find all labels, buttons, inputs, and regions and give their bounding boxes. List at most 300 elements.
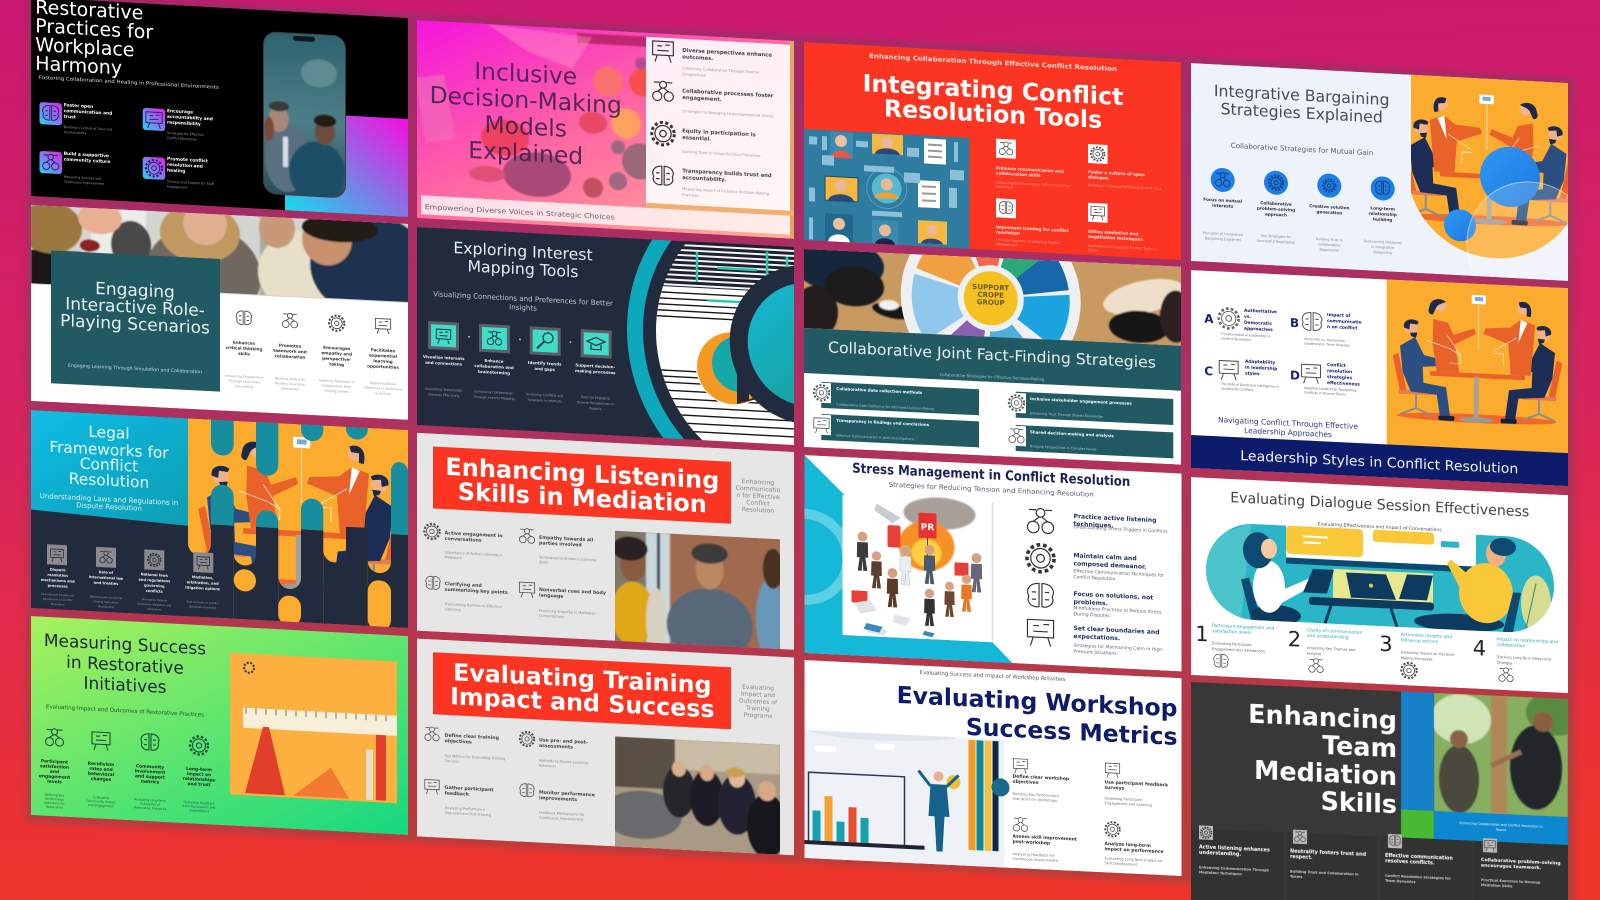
training point 1: objectives [445, 738, 472, 746]
icon: idea gear [1027, 544, 1054, 572]
benefit 2: Realistic Character [275, 381, 306, 387]
slide: Evaluating Workshop Success Metrics [804, 660, 1182, 876]
skill 2: Skills [539, 560, 548, 565]
benefit 4: Exploring Ethical [370, 381, 396, 386]
metric 2: and understanding [1307, 633, 1349, 641]
metric 3: Actionable insights and [1401, 632, 1452, 640]
benefit 4: Facilitates [371, 347, 396, 353]
benefit 3: Fostering Teamwork in [319, 378, 355, 384]
point 4 [682, 168, 772, 197]
metric 4: Tracking Long-Term Behavioral [1496, 655, 1551, 662]
icon: accountability [143, 108, 165, 131]
strategy 1: Focus on mutual [1203, 197, 1243, 204]
benefit 3: Encourages [323, 345, 351, 351]
tip 2: Effective Communication Techniques for [1074, 568, 1164, 579]
tool 3: resolution [996, 229, 1020, 236]
style C [1204, 357, 1279, 393]
subtitle: Strategies for Reducing Tension and Enhancing Resolution [889, 481, 1094, 499]
tip 1: Understanding Stress Triggers in Conflicts [1074, 524, 1168, 535]
metric 4: Skill Development [1104, 861, 1138, 867]
strategy 2: approach [1265, 211, 1287, 218]
slide: Integrating Conflict Resolution Tools [804, 42, 1181, 260]
benefit 3: perspective- [322, 356, 352, 362]
title panel [31, 410, 188, 526]
law 2: Role of [99, 570, 114, 575]
step 4: making processes [575, 368, 616, 375]
item: community: community culture [64, 157, 110, 165]
item: accountability: Strategies for Effective [167, 131, 204, 137]
strategy 4: in Integrative [1371, 245, 1394, 250]
metric 4: Gathering Feedback [183, 800, 215, 806]
slide: Inclusive Decision-Making Models Explained [414, 20, 794, 239]
style C: Adaptability [1245, 359, 1275, 366]
skill 1: Importance of Active Listening in [445, 550, 502, 557]
metric 1: Define clear workshop [1013, 773, 1070, 782]
strategy 3: generation [1316, 209, 1342, 216]
slide: Integrative Bargaining Strategies Explained [1191, 63, 1568, 281]
skill 2: Neutrality fosters trust and [1290, 848, 1367, 858]
item: accountability: responsibility [167, 120, 201, 127]
benefit 2: Interaction [281, 386, 299, 391]
step 4: Projects [589, 406, 602, 411]
metric 3: Making Processes [1401, 656, 1433, 662]
slide: Legal Frameworks for Conflict Resolution [31, 410, 408, 632]
law 1: Dispute [50, 568, 66, 572]
training point 1: Key Metrics for Evaluating Training [445, 754, 505, 761]
slide: Enhancing Team Mediation Skills [1191, 675, 1586, 900]
style B: B [1290, 316, 1299, 330]
title band: Collaborative Strategies for Effective Decision-Making [940, 372, 1045, 382]
title: Measuring Success [44, 631, 206, 659]
training point 3: Gather participant [445, 785, 494, 793]
metric 2: Community Impact [86, 799, 117, 804]
metric 1: Defining Key Performance [1013, 792, 1060, 798]
side subtitle: Outcomes of [739, 697, 778, 706]
metric 1: Restorative [46, 805, 63, 810]
metric 4 [1104, 822, 1164, 868]
title band: Leadership Styles in Conflict Resolution [1240, 448, 1518, 477]
skill 3: Overcoming Barriers to Effective [445, 602, 502, 609]
icon: board [653, 41, 673, 63]
step 3: Analyzing Conflicts and [526, 392, 563, 398]
subtitle: Insights [509, 302, 537, 313]
title: Resolution Tools [884, 94, 1102, 134]
icon: communication [40, 102, 62, 125]
tip 4: Strategies for Maintaining Calm in High- [1074, 643, 1164, 653]
metric 3: 3 [1379, 631, 1393, 656]
law 4: Resolution Processes [189, 604, 217, 610]
skill 1: Active engagement in [445, 530, 503, 539]
law 1 [41, 544, 75, 607]
step 2 [472, 323, 515, 401]
tip 4: expectations. [1074, 633, 1120, 642]
point 1: Perspectives [682, 72, 706, 78]
style A: Democratic [1244, 320, 1273, 327]
strategy 1: Principles of Integrative [1203, 231, 1243, 237]
step 1: Interests Effectively [428, 392, 460, 398]
strategy 4: building [1373, 216, 1392, 222]
tip 1: Practice active listening [1074, 513, 1156, 524]
style B: Autocratic vs. Democratic [1304, 337, 1345, 343]
step 2: Through Interest Mapping [472, 395, 515, 401]
title: Harmony [35, 53, 122, 79]
law 3: conflicts [146, 589, 163, 594]
training point 3 [425, 779, 494, 817]
finding 4 [1007, 425, 1173, 458]
tool 4: Utilize mediation and [1088, 229, 1138, 236]
strategy 4: Long-term [1370, 205, 1396, 212]
title: Workplace [35, 34, 134, 61]
metric 4: and trust [188, 781, 210, 788]
metric 4: from Participants and [182, 804, 216, 810]
training point 3: feedback [445, 790, 470, 798]
title panel: Legal [88, 423, 130, 443]
style B: communicatio [1327, 318, 1362, 326]
subtitle: Leadership Approaches [1244, 426, 1332, 439]
style D: Adaptive Leadership: Navigating [1304, 386, 1356, 392]
strategy 3: Negotiation [1319, 248, 1339, 253]
illustration: meeting in circle [1402, 74, 1595, 313]
slide: Stress Management in Conflict Resolution [762, 453, 1182, 671]
metric 4: Evaluating Long-Term Impact on [1104, 856, 1162, 863]
training point 4: improvements [539, 795, 577, 803]
law 4: Role of Courts in Conflict [187, 600, 219, 605]
benefit 1: Storytelling [235, 384, 253, 389]
slide: Evaluating Dialogue Session Effectiveness [1191, 477, 1568, 693]
skill 3 [426, 576, 508, 614]
metric 2 [1104, 763, 1169, 808]
skill 3: Effective communication [1385, 853, 1453, 862]
tool 1: Enhance communication and [996, 165, 1064, 174]
metric 2: rates and [89, 766, 113, 773]
title: Models [484, 110, 567, 143]
training point 1: Define clear training [445, 733, 499, 741]
skill 1 [424, 523, 503, 562]
title panel: Understanding Laws and Regulations in [40, 492, 178, 507]
tool 2: Foster a culture of open [1088, 169, 1145, 177]
style A: Authoritative [1244, 308, 1277, 315]
style A: Transformational Leadership in [1220, 332, 1270, 338]
title: Team [1322, 730, 1397, 763]
skill 4: language [539, 593, 563, 600]
title panel [51, 251, 220, 392]
abstract chart image [635, 162, 971, 515]
tip 2: composed demeanor. [1074, 560, 1146, 571]
title box [433, 447, 731, 524]
skill 2 [519, 528, 596, 567]
metric 3: Restorative Practices [134, 805, 167, 811]
title box: Evaluating Training [453, 658, 711, 699]
metric 2: Insights [1307, 652, 1321, 656]
metric 1 [1012, 759, 1070, 804]
finding 4: Bridging Perspectives in Complex Issues [1030, 444, 1097, 451]
photo: group discussion [18, 192, 430, 336]
point 1: Enhancing Collaboration Through Diverse [682, 66, 760, 75]
skill 4 [1474, 838, 1568, 900]
tip 3: During Disputes [1074, 611, 1110, 619]
finding 3: Enhancing Trust Through Shared Knowledge [1030, 411, 1103, 419]
benefit 3 [319, 315, 355, 394]
step 4: Support decision- [575, 362, 616, 370]
training point 4: Feedback Mechanisms for [539, 811, 585, 817]
benefit 4: learning [373, 358, 393, 364]
finding 1 [812, 381, 979, 415]
skill 4 [519, 582, 606, 621]
metric 4: relationships [183, 776, 216, 784]
style C: styles [1245, 371, 1260, 377]
training point 2: assessments [539, 743, 573, 751]
point 4: accountability. [682, 175, 726, 183]
benefit 1: Enhances [233, 340, 256, 346]
title: Practices for [35, 15, 153, 44]
style A: approaches [1244, 326, 1273, 333]
tip 4 [1074, 625, 1164, 659]
title: Integrative Bargaining [1214, 81, 1389, 109]
point 4: Measuring Impact of Inclusive Decision-Making [682, 187, 769, 196]
tool 4 [1087, 203, 1156, 256]
training point 3: Improvement Post-Training [445, 811, 491, 817]
metric 1: 1 [1195, 621, 1209, 646]
title panel: Conflict [80, 455, 138, 476]
law 3: Arbitration [147, 607, 162, 612]
step 4: Tools for Engaging [580, 395, 610, 401]
point 2: Strategies for Engaging Underrepresented Voices [682, 109, 773, 118]
style A [1204, 306, 1277, 343]
metric 4 [182, 736, 216, 814]
style B: Leadership in Team Disputes [1304, 341, 1350, 348]
skill 2: Empathy towards all [539, 535, 594, 544]
item: accountability: accountability and [167, 114, 213, 122]
style C: in leadership [1245, 365, 1277, 372]
icon: person [653, 81, 673, 101]
title: Success Metrics [966, 713, 1178, 751]
skill 2: respect. [1290, 854, 1313, 861]
metric 1: Engagement and Satisfaction [1212, 647, 1265, 654]
tip 3: problems. [1074, 599, 1108, 607]
skill 1: Enhancing Communication Through [1199, 865, 1270, 873]
skill 2: Techniques to Enhance Listening [538, 555, 596, 562]
benefit 4 [364, 318, 402, 397]
benefit 2: Building Skills with [275, 376, 305, 382]
skill 3: Clarifying and [445, 581, 482, 589]
style B [1290, 310, 1362, 348]
metric 4: Long-term [186, 766, 212, 773]
side subtitle: n for Effective [736, 492, 780, 501]
law 4: litigation options [185, 586, 220, 591]
title panel: Resolution [69, 470, 149, 492]
metric 3: Continuous Improvement [1013, 857, 1059, 863]
training point 2: Use pre- and post- [539, 737, 588, 746]
item: open communication: Building a Culture of Trust and [64, 125, 112, 132]
metric 3: Outcomes of [140, 802, 161, 807]
illustration: meeting [1387, 279, 1568, 456]
step 2: Enhancing Collaboration [475, 389, 513, 395]
item: open communication [64, 102, 112, 137]
title: Decision-Making [430, 81, 622, 119]
tool 3: Implement training for conflict [996, 224, 1069, 233]
strategy 2: Collaborative [1260, 200, 1292, 207]
tool 2 [1088, 144, 1162, 191]
skill 1: Mediation [445, 555, 462, 560]
title panel: Frameworks for [49, 438, 169, 462]
caption strip [1434, 811, 1568, 845]
slide: Collaborative Joint Fact-Finding Strategies [794, 199, 1192, 465]
metric 4: Changes [1497, 661, 1512, 665]
subtitle: Fostering Collaboration and Healing in Professional Environments [39, 75, 219, 91]
benefit 2 [273, 312, 307, 392]
style A: vs. [1244, 315, 1251, 320]
law 1: Agreements in Conflict [43, 597, 72, 602]
law 1: mechanisms and [41, 578, 75, 584]
icon: brain [1028, 583, 1053, 608]
finding 4: Shared decision-making and analysis [1030, 429, 1114, 438]
metric 2: Clarity of communication [1307, 627, 1362, 636]
side subtitle: Conflict [746, 499, 770, 508]
side subtitle: Evaluating [742, 684, 774, 692]
skill 2: Building Trust and Collaboration in [1290, 869, 1359, 877]
title band: Collaborative Joint Fact-Finding Strategies [828, 338, 1156, 372]
finding 1: Collaborative Data Gathering for Informed Decision-Making [836, 403, 934, 411]
tip 3: Mindfulness Practices to Reduce Stress [1074, 605, 1162, 616]
metric 3: involvement [135, 768, 165, 776]
step 4 [575, 329, 616, 412]
metric 4: collaboration [1497, 642, 1526, 649]
skill 4: Practical Exercises to Develop [1481, 878, 1541, 885]
benefit 1 [225, 310, 264, 390]
benefit 3: Collaborative Role- [322, 384, 352, 389]
tool 1: Resolution [996, 185, 1013, 190]
style C: The Role of Emotional Intelligence in [1220, 382, 1279, 389]
illustration: workshop metrics [804, 730, 1010, 868]
skill 4: Mediation Skills [1481, 883, 1512, 888]
step 2: collaboration and [474, 363, 514, 370]
title box [433, 652, 731, 729]
point 3 [682, 128, 761, 158]
icon: listening [1027, 508, 1054, 534]
training point 4: Continuous Improvement [539, 816, 584, 822]
item: healing: Promote conflict [167, 156, 208, 164]
title: Strategies Explained [1221, 99, 1383, 127]
title: Evaluating Dialogue Session Effectiveness [1230, 490, 1529, 521]
icon: phone [1027, 619, 1054, 647]
tip 1: techniques. [1074, 521, 1114, 530]
metric 3: Analyzing Feedback for [1013, 852, 1055, 858]
metric 1 [1195, 621, 1275, 670]
strategy 3: Building Trust in [1316, 237, 1343, 242]
law 2: international law [89, 575, 124, 581]
cyan frame [762, 453, 1012, 663]
metric 4: 4 [1473, 635, 1486, 661]
training point 4: Monitor performance [539, 790, 595, 798]
photo: team stacking blocks [1431, 686, 1586, 819]
title: Explained [468, 136, 583, 170]
metric 1: Defining Key [45, 793, 64, 798]
metric 1: engagement [39, 773, 70, 781]
gradient panel behind phone [285, 112, 408, 217]
title: Mapping Tools [467, 256, 579, 281]
finding 2: Transparency in findings and conclusions [836, 418, 930, 427]
illustration: dialogue pill [1206, 522, 1554, 638]
metric 3 [1379, 631, 1456, 680]
metric 4: Analyze long-term [1104, 841, 1151, 849]
item: community: Measuring Success and [64, 175, 101, 181]
tool 3: Management [996, 242, 1018, 247]
law 3: and regulations [138, 578, 170, 583]
tool 4: Teams [1087, 248, 1099, 253]
item: healing: Training and Support for Staff [166, 179, 215, 186]
benefit 3: empathy and [321, 350, 352, 357]
law 2: National Laws Governing [90, 594, 123, 600]
metric 3 [134, 733, 167, 811]
subtitle: Visualizing Connections and Preferences for Better [433, 289, 613, 308]
skill 3 [1380, 834, 1472, 900]
point 4: Practices [682, 193, 699, 198]
eyebrow: Enhancing Collaboration Through Effective Conflict Resolution [869, 52, 1117, 73]
law 4: arbitration, and [187, 580, 219, 586]
metric 3: Assessing Impact on Decision- [1401, 650, 1456, 657]
tip 3 [1074, 591, 1162, 622]
strategy 2 [1257, 170, 1295, 245]
skill 2: Teams [1290, 874, 1302, 879]
panel: key points [646, 33, 794, 239]
law 3: Resolution: Mediation and [137, 602, 171, 607]
slide: Evaluating Training Impact and Success [417, 638, 794, 859]
strategy 4 [1364, 175, 1402, 256]
benefit 1: critical thinking [226, 345, 262, 352]
photo: support group wheel [794, 199, 1192, 398]
strategy 2: Key Strategies for [1261, 234, 1292, 239]
icon: healing [143, 157, 165, 180]
law 2: Dispute Settlement [93, 599, 119, 605]
point 3: Equity in participation is [682, 128, 756, 138]
metric 2: 2 [1288, 626, 1301, 652]
side subtitle: Enhancing [742, 478, 774, 487]
metric 3 [1012, 817, 1078, 864]
skill 1: Mediation Techniques [1199, 870, 1242, 876]
step 3: Identify trends [528, 360, 562, 367]
point 2: Collaborative processes foster [682, 88, 774, 99]
tip 2 [1074, 552, 1164, 585]
law 3: National laws [141, 572, 168, 578]
step 1: Visualizing Stakeholder [425, 387, 463, 393]
metric 2 [1288, 626, 1362, 675]
finding 1: Collaborative data collection methods [836, 386, 923, 395]
benefit 2: teamwork and [273, 348, 307, 354]
style D [1290, 360, 1360, 397]
illustration card: crisis scene [842, 493, 992, 642]
subtitle: Evaluating Effectiveness and Impact of Conversations [1318, 521, 1442, 533]
title: Exploring Interest [453, 238, 593, 264]
tip 4: Pressure Situations [1074, 649, 1117, 657]
skill 4: Practicing Empathy in Mediation [539, 609, 596, 616]
point 1: Diverse perspectives enhance [682, 48, 772, 59]
law 1: resolution [47, 573, 68, 578]
photo: training room [602, 736, 787, 859]
point 1: outcomes. [682, 54, 713, 62]
tool 2: Building a Culture of Collaboration and Trust [1088, 183, 1162, 191]
title: Inclusive [474, 57, 577, 91]
caption strip: Enhancing Collaboration and Conflict Resolution in [1459, 821, 1543, 829]
tip 1 [1074, 513, 1168, 535]
metric 2: surveys [1104, 785, 1125, 792]
tool 1: Enhancing Communication Skills for Conflict [996, 180, 1070, 188]
benefit 4: Scenarios [375, 391, 391, 396]
training point 1: Success [445, 759, 459, 764]
metric 2: and Engagement [88, 803, 115, 808]
strategy 4: relationship [1369, 211, 1397, 217]
metric 1 [39, 728, 70, 810]
metric 1: Indicators for Workshops [1013, 797, 1057, 803]
